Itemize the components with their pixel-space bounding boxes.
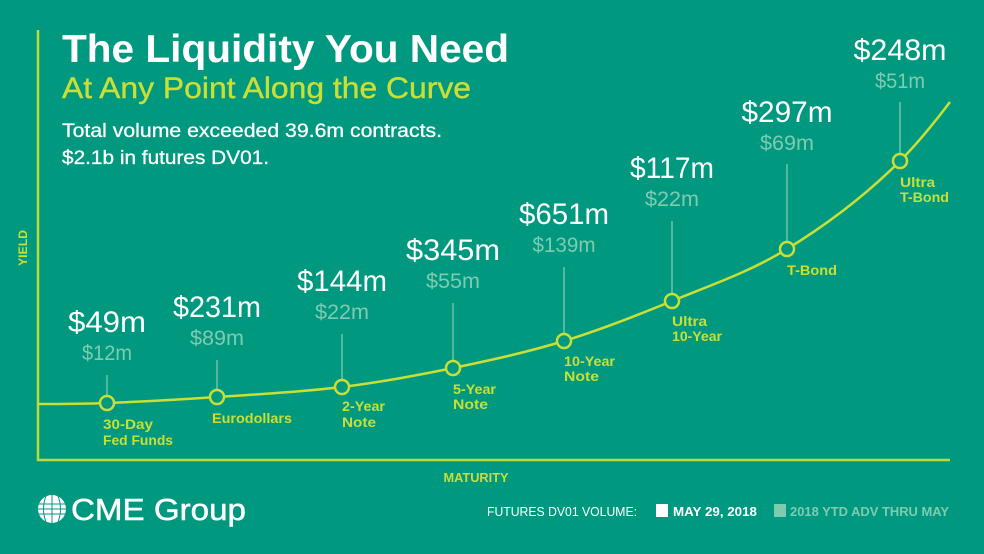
data point: Ultra T-Bond: $248m: [854, 34, 946, 67]
data point: 10-Year Note: Note: [564, 368, 599, 384]
data point: Ultra 10-Year: 10-Year: [672, 328, 723, 344]
data point: T-Bond: T-Bond: [787, 262, 837, 278]
x axis label: MATURITY: [444, 471, 509, 485]
title: The Liquidity You Need: [62, 28, 509, 71]
yield curve: [38, 102, 950, 404]
legend swatch: 2018 YTD ADV: [774, 504, 786, 517]
data point: Ultra 10-Year: Ultra: [672, 313, 707, 329]
data point: 2-Year Note: $144m: [297, 265, 387, 298]
data point: Ultra T-Bond: Ultra: [900, 174, 935, 190]
subtitle: At Any Point Along the Curve: [62, 72, 471, 105]
summary text: [62, 120, 442, 169]
data point: 2-Year Note: $22m: [315, 301, 369, 324]
data point: Eurodollars: [173, 291, 292, 426]
data point: 30-Day Fed Funds: [68, 306, 173, 448]
data point: 5-Year Note: $55m: [426, 270, 480, 293]
data point: 30-Day Fed Funds: $49m: [68, 306, 146, 339]
data point: T-Bond: $297m: [742, 96, 832, 129]
data point: Eurodollars: $89m: [190, 327, 244, 350]
data point: T-Bond: [742, 96, 837, 278]
y axis label: YIELD: [16, 230, 30, 266]
data point: Eurodollars: Eurodollars: [212, 410, 292, 426]
legend: FUTURES DV01 VOLUME:: [487, 505, 637, 519]
legend swatch: May 29, 2018: [656, 504, 668, 517]
data point: 5-Year Note: $345m: [406, 234, 500, 267]
logo: CME Group: CME Group: [71, 492, 246, 527]
data point: 30-Day Fed Funds: Fed Funds: [103, 432, 173, 448]
legend: 2018 YTD ADV THRU MAY: [790, 505, 950, 519]
data point: Eurodollars: $231m: [173, 291, 261, 324]
data point: 30-Day Fed Funds: 30-Day: [103, 416, 153, 432]
data point: 10-Year Note: 10-Year: [564, 353, 616, 369]
data point: Ultra 10-Year: [630, 152, 723, 344]
data point: Ultra 10-Year: $22m: [645, 188, 699, 211]
data point: 5-Year Note: Note: [453, 396, 488, 412]
summary text: $2.1b in futures DV01.: [62, 147, 269, 169]
data point: 5-Year Note: [406, 234, 500, 412]
chart axes: [38, 30, 950, 460]
data point: T-Bond: $69m: [760, 132, 814, 155]
data point: Ultra T-Bond: [854, 34, 949, 205]
legend: [487, 504, 950, 519]
data point: 5-Year Note: 5-Year: [453, 381, 497, 397]
data point: Ultra T-Bond: T-Bond: [900, 189, 949, 205]
data point: 2-Year Note: [297, 265, 387, 430]
data point: 2-Year Note: 2-Year: [342, 398, 386, 414]
data point: 30-Day Fed Funds: $12m: [82, 342, 132, 365]
legend: MAY 29, 2018: [673, 505, 757, 519]
data point: 10-Year Note: $139m: [532, 234, 596, 257]
data point: 2-Year Note: Note: [342, 414, 376, 430]
icon: globe: [38, 495, 66, 523]
data point: 10-Year Note: $651m: [519, 198, 609, 231]
summary text: Total volume exceeded 39.6m contracts.: [62, 120, 442, 142]
data point: Ultra 10-Year: $117m: [630, 152, 714, 185]
data point: 10-Year Note: [519, 198, 616, 384]
data point: Ultra T-Bond: $51m: [875, 70, 925, 93]
